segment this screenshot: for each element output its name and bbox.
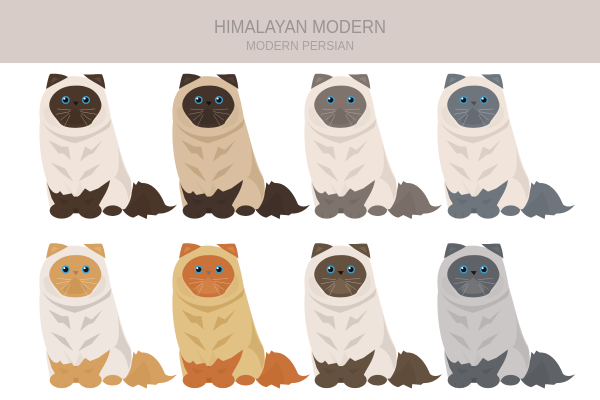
title: HIMALAYAN MODERN: [214, 16, 386, 37]
cat: flame point, golden coat: [172, 243, 310, 388]
cat: seal point, tan coat: [172, 74, 310, 219]
header banner: [0, 0, 600, 63]
cat: blue point, cream coat: [437, 74, 575, 219]
subtitle: MODERN PERSIAN: [246, 39, 354, 53]
cat: blue point, grey coat: [437, 243, 575, 388]
cat: lilac point, cream coat: [304, 74, 442, 219]
cat: seal point, cream coat: [39, 74, 177, 219]
cat: chocolate point, cream coat: [304, 243, 442, 388]
cat: cream point, white coat: [39, 243, 177, 388]
